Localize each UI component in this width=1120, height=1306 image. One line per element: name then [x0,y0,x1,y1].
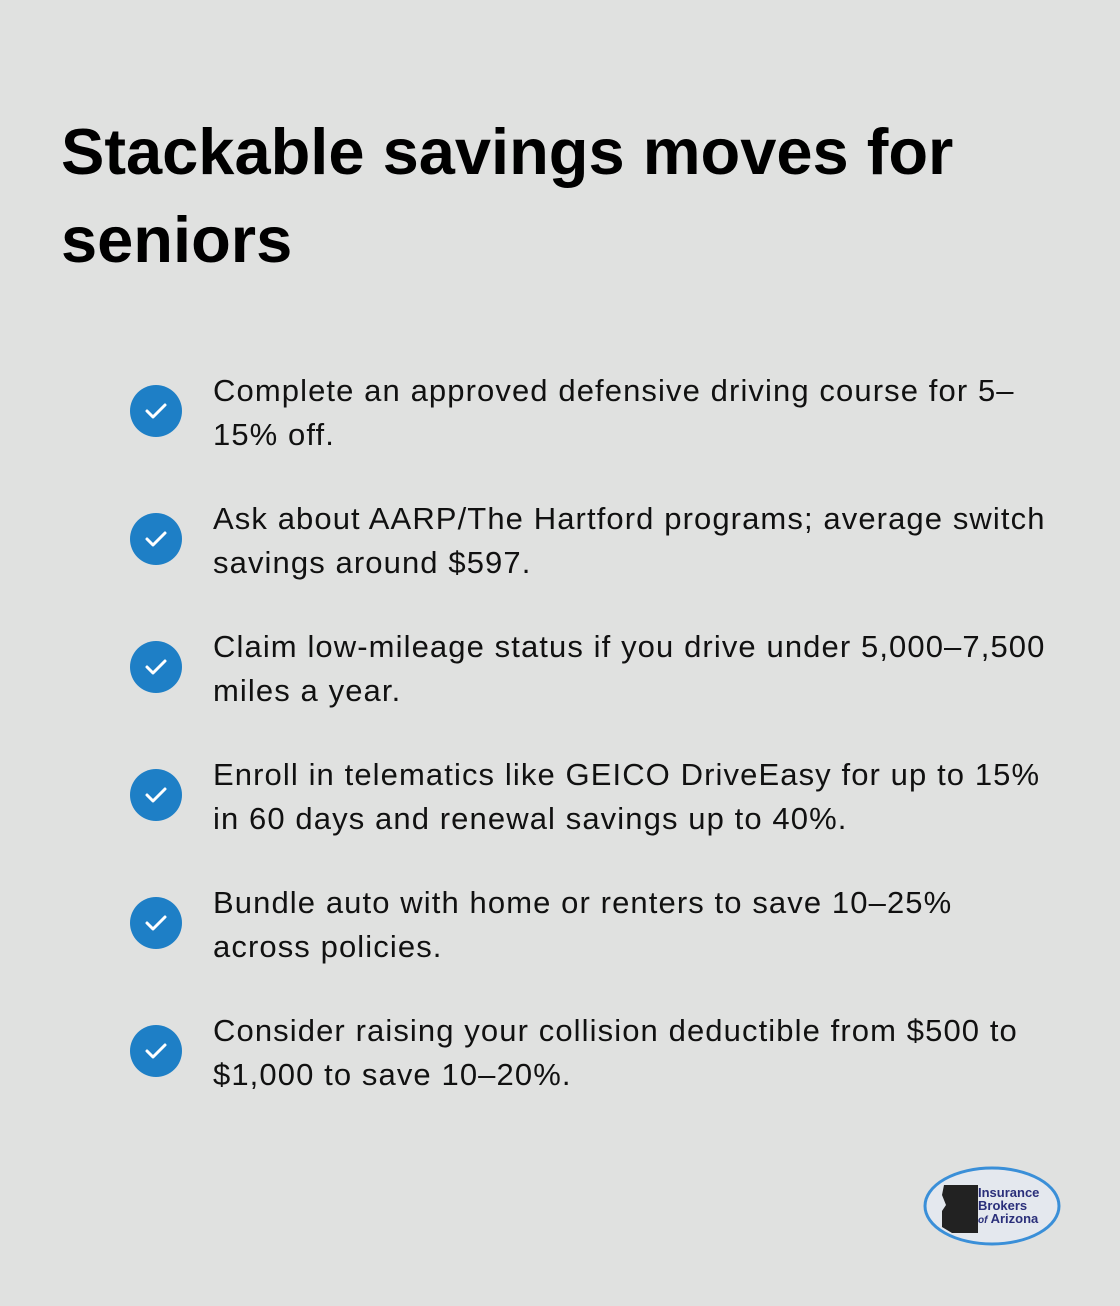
item 1: Complete an approved defensive driving course for 5– [213,373,1015,408]
item 5: Bundle auto with home or renters to save 10–25% [213,885,952,920]
item 3 [130,629,1045,708]
logo: Brokers [978,1198,1027,1213]
title: seniors [61,203,292,276]
item 3: Claim low-mileage status if you drive under 5,000–7,500 [213,629,1045,664]
icon: check [130,641,182,693]
icon: check [130,769,182,821]
item 2 [130,501,1046,580]
item 6: $1,000 to save 10–20%. [213,1057,572,1092]
item 5: across policies. [213,929,443,964]
icon: check [130,897,182,949]
item 4: in 60 days and renewal savings up to 40%. [213,801,847,836]
logo: Insurance [978,1185,1039,1200]
logo [924,1166,1060,1246]
item 6: Consider raising your collision deductible from $500 to [213,1013,1018,1048]
item 3: miles a year. [213,673,401,708]
item 6 [130,1013,1018,1092]
item 1: 15% off. [213,417,335,452]
item 4: Enroll in telematics like GEICO DriveEasy for up to 15% [213,757,1040,792]
item 2: savings around $597. [213,545,531,580]
title: Stackable savings moves for [61,115,953,188]
item 2: Ask about AARP/The Hartford programs; average switch [213,501,1046,536]
item 1 [130,373,1015,452]
item 4 [130,757,1040,836]
title [61,115,953,276]
item 5 [130,885,952,964]
icon: check [130,385,182,437]
logo: of Arizona [978,1211,1039,1226]
icon: check [130,1025,182,1077]
icon: check [130,513,182,565]
